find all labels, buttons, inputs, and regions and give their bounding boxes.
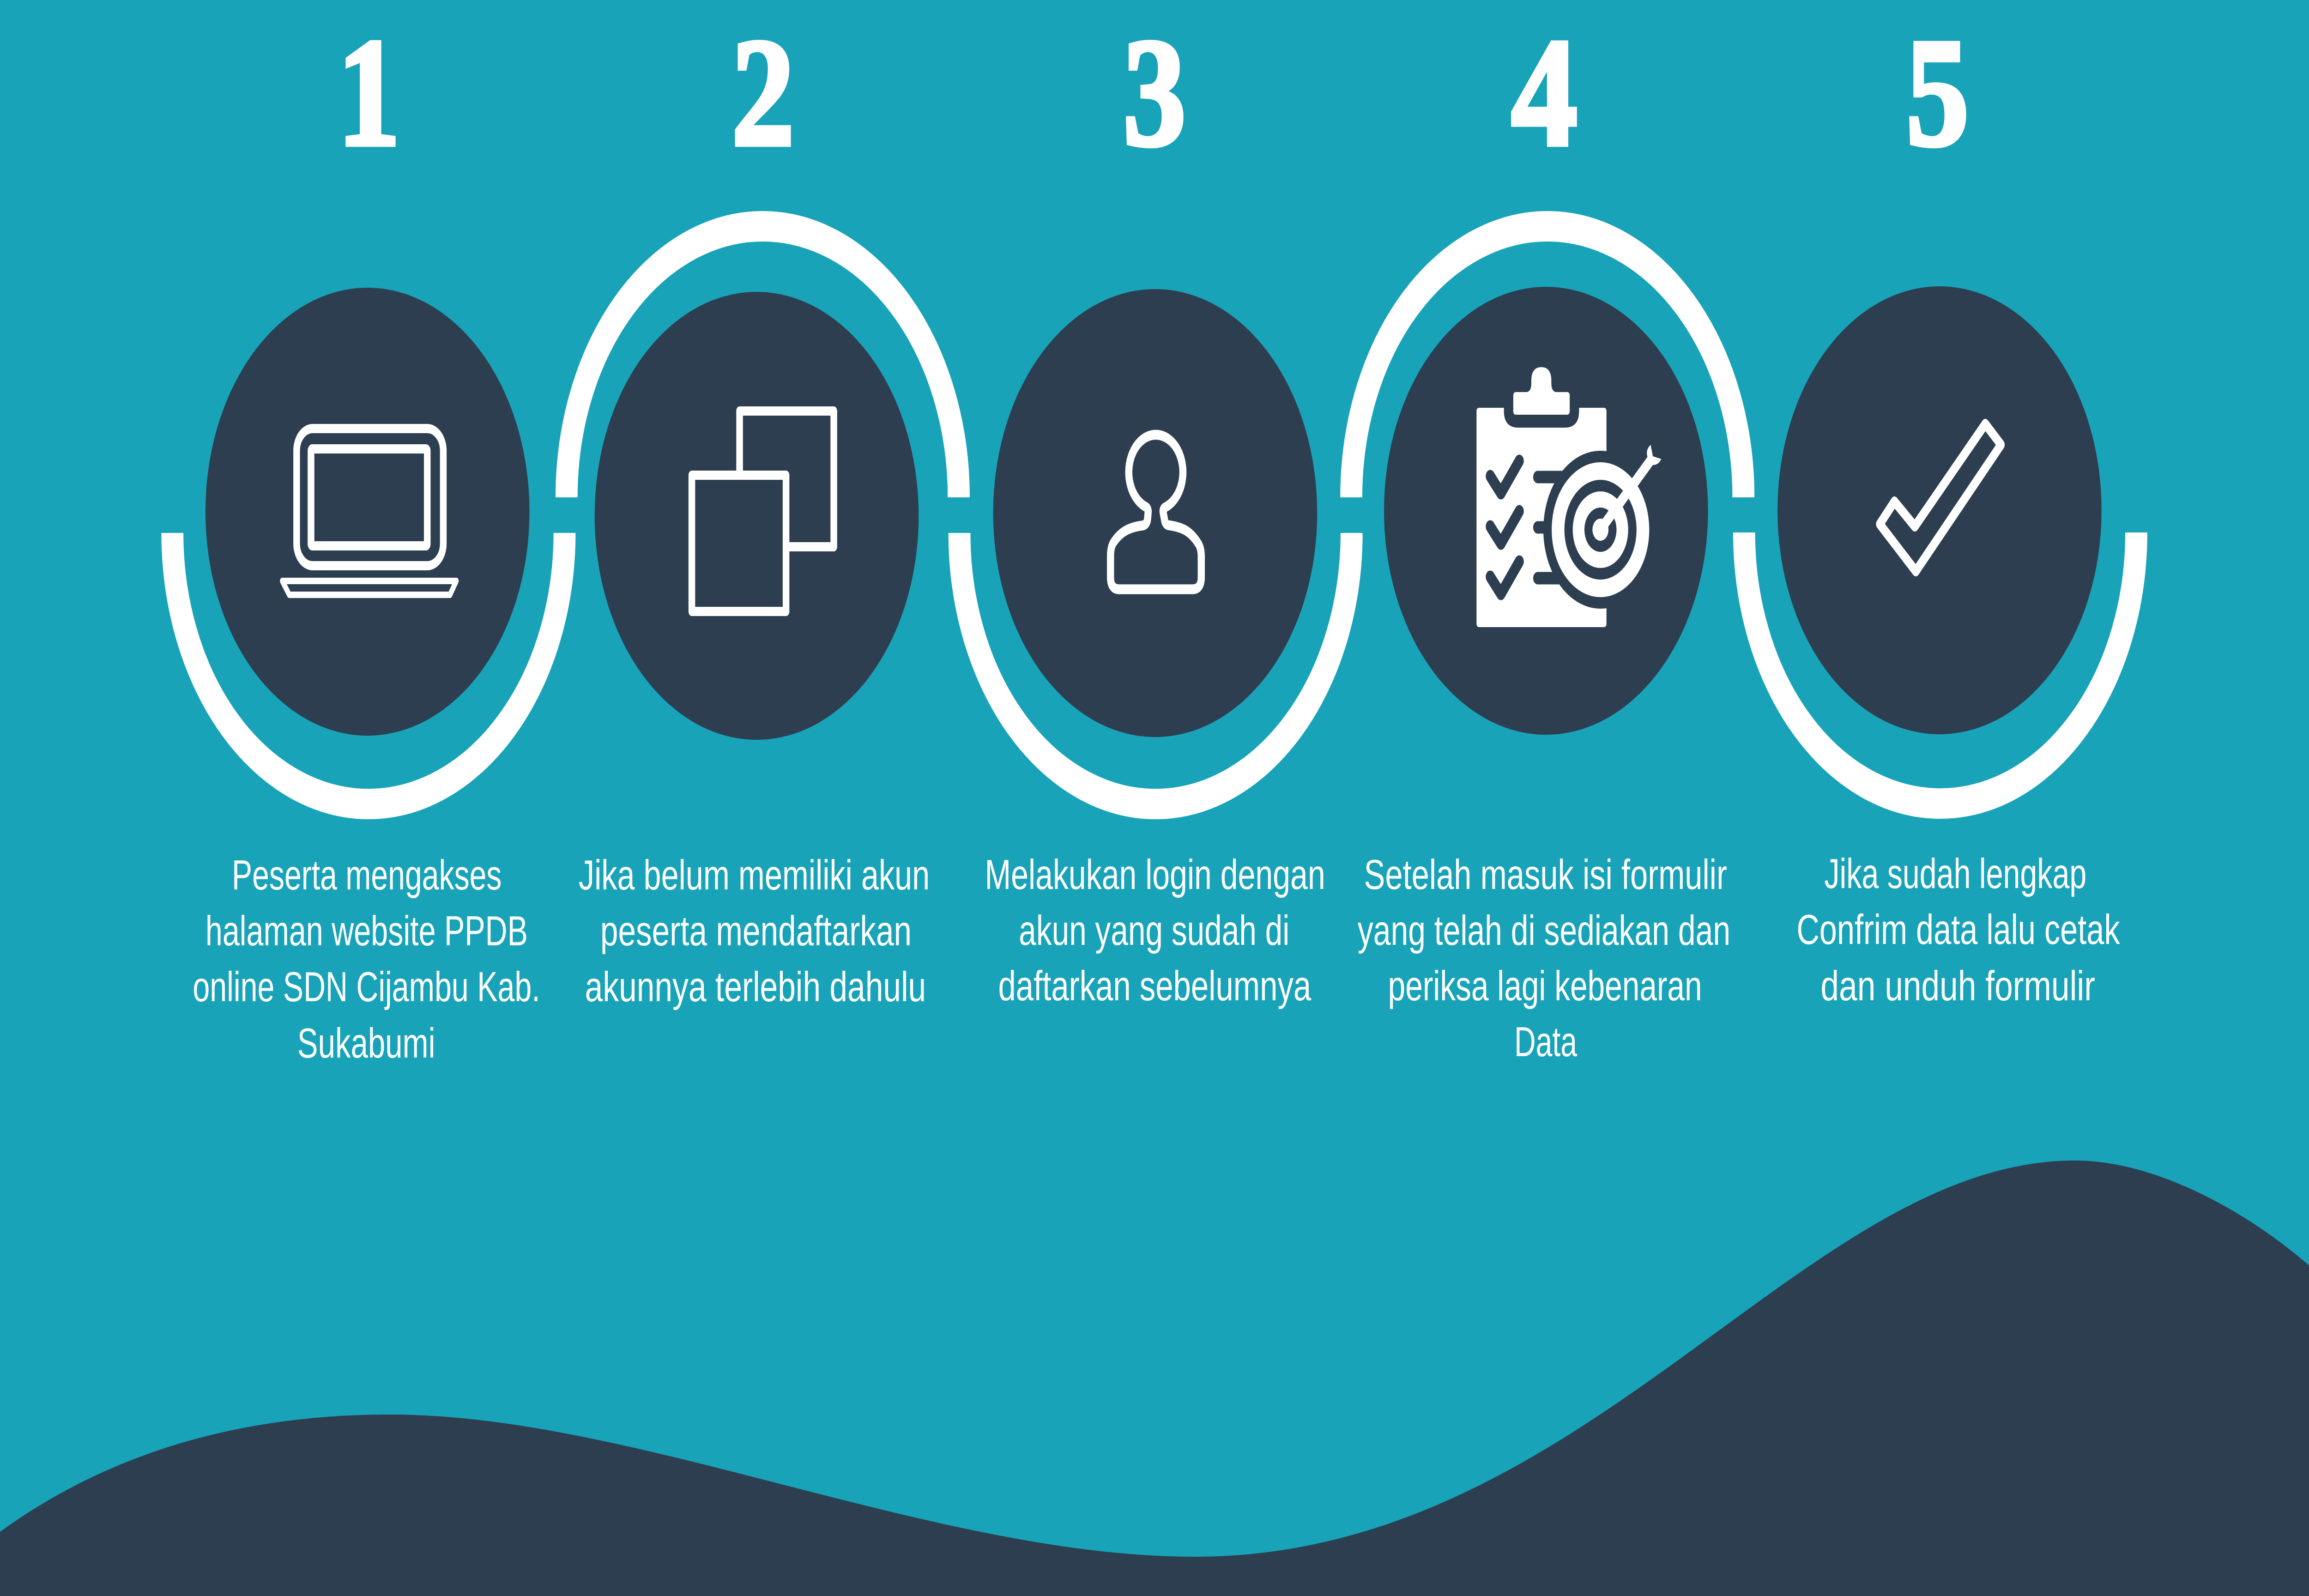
text: step 1: halaman website PPDB [206,907,528,954]
icon: laptop [282,429,456,595]
step 2 [567,7,959,1010]
text: step 1: online SDN Cijambu Kab. [193,963,540,1010]
text: step 1: Sukabumi [297,1019,435,1066]
circle 4 [1384,287,1708,735]
text: step 2: peserta mendaftarkan [600,907,912,954]
text: step 3: Melakukan login dengan [985,851,1325,898]
text: step 2: akunnya terlebih dahulu [585,963,926,1010]
step 4 [1351,7,1743,1065]
text: step 5: Jika sudah lengkap [1824,850,2086,897]
circle 3 [993,289,1317,737]
text: step 4: periksa lagi kebenaran [1388,962,1702,1009]
number 2: 2 [731,7,794,178]
text: step 4: Setelah masuk isi formulir [1364,851,1727,898]
text: step 3: akun yang sudah di [1019,907,1289,954]
text: step 1: Peserta mengakses [232,851,502,898]
text: step 2: Jika belum memiliki akun [579,851,930,898]
icon: user [1111,435,1201,589]
circle 5 [1777,286,2102,734]
number 5: 5 [1906,7,1969,178]
number 4: 4 [1511,7,1578,178]
ring 2 [567,226,959,497]
circle 2 [595,292,919,740]
ring 5 [1744,532,2136,804]
icon: clipboard with target [1476,367,1661,627]
ring 4 [1351,226,1743,497]
text: step 4: yang telah di sediakan dan [1358,907,1730,954]
ring 1 [172,533,565,804]
text: step 5 [1796,850,2120,1009]
text: step 3 [985,851,1325,1009]
text: step 4 [1358,851,1730,1065]
text: step 2 [579,851,930,1010]
text: step 1 [193,851,540,1066]
step 1 [172,7,565,1066]
text: step 4: Data [1514,1018,1578,1065]
bottom wave [0,1161,2309,1596]
text: step 5: Confrim data lalu cetak [1796,906,2120,953]
icon: check mark [1880,424,2001,571]
step 3 [960,7,1352,1009]
text: step 3: daftarkan sebelumnya [998,962,1312,1009]
circle 1 [206,288,530,736]
number 1: 1 [338,7,400,178]
ring 3 [960,533,1352,804]
icon: overlapping squares [692,411,834,611]
step 5 [1744,7,2136,1009]
text: step 5: dan unduh formulir [1820,962,2095,1009]
number 3: 3 [1123,7,1186,178]
